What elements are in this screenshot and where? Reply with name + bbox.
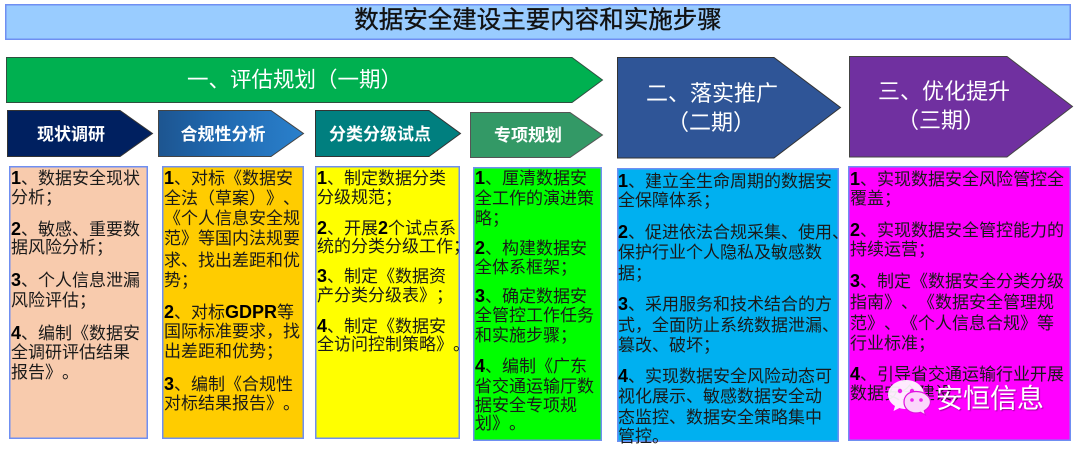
arrow: special planning (470, 112, 604, 158)
panel: phase two tasks: 态监控、数据安全策略集中 (618, 408, 822, 427)
panel: phase two tasks: 管控。 (618, 427, 669, 446)
panel: phase three tasks: 覆盖； (850, 189, 901, 208)
panel: phase two tasks: 保护行业个人隐私及敏感数 (618, 243, 822, 262)
panel: compliance analysis: 全法（草案）》、 (164, 189, 300, 208)
panel: current state survey: 报告》。 (11, 363, 79, 382)
panel: special planning: 2、构建数据安 (475, 238, 587, 258)
panel: classification pilot (315, 166, 460, 439)
arrow: phase two (617, 57, 842, 158)
panel: current state survey: 2、敏感、重要数 (11, 219, 140, 239)
panel: compliance analysis: 对标结果报告》。 (164, 394, 300, 413)
phase three label: 三、优化提升 (878, 79, 1010, 104)
phase three period: （三期） (897, 108, 985, 133)
phase two label: 二、落实推广 (646, 81, 778, 106)
panel: compliance analysis: 势； (164, 271, 198, 290)
phase one label: 一、评估规划（一期） (187, 68, 402, 92)
panel: special planning: 4、编制《广东 (475, 356, 587, 376)
panel: special planning: 全管控工作任务 (475, 306, 594, 325)
panel: special planning: 3、确定数据安 (475, 286, 587, 306)
panel: current state survey: 风险评估； (11, 291, 96, 310)
special planning label: 专项规划 (494, 126, 562, 145)
panel: phase three tasks: 行业标准； (850, 334, 935, 353)
panel: compliance analysis: 1、对标《数据安 (164, 168, 293, 188)
panel: current state survey: 据风险分析； (11, 238, 113, 257)
panel: phase two tasks: 2、促进依法合规采集、使用、 (618, 222, 849, 242)
panel: phase two tasks: 视化展示、敏感数据安全动 (618, 387, 822, 406)
panel: special planning: 全体系框架； (475, 258, 577, 277)
panel: classification pilot: 产分类分级表》； (317, 286, 453, 305)
panel: phase three tasks: 范》、《个人信息合规》等 (850, 314, 1054, 333)
panel: special planning: 全工作的演进策 (475, 189, 594, 208)
panel: current state survey: 3、个人信息泄漏 (11, 270, 140, 290)
panel: phase two tasks: 据； (618, 264, 652, 283)
panel: classification pilot: 统的分类分级工作； (317, 237, 470, 256)
panel: compliance analysis (162, 166, 304, 439)
panel: compliance analysis: 求、找出差距和优 (164, 251, 300, 270)
phase two period: （二期） (667, 110, 755, 135)
panel: current state survey (9, 166, 148, 439)
panel: phase two tasks: 3、采用服务和技术结合的方 (618, 294, 832, 314)
panel: current state survey: 1、数据安全现状 (11, 168, 140, 188)
watermark text: 安恒信息 (936, 384, 1044, 414)
panel: classification pilot: 1、制定数据分类 (317, 168, 446, 188)
panel: special planning: 和实施步骤； (475, 326, 577, 345)
panel: classification pilot: 2、开展2个试点系 (317, 218, 456, 238)
panel: phase two tasks: 1、建立全生命周期的数据安 (618, 171, 832, 191)
panel: phase two tasks: 全保障体系； (618, 191, 720, 210)
panel: phase three tasks: 数据安全建设。 (850, 384, 969, 403)
panel: phase three tasks: 2、实现数据安全管控能力的 (850, 220, 1064, 240)
panel: classification pilot: 分级规范； (317, 188, 402, 207)
arrow: current state survey (7, 110, 154, 157)
panel: compliance analysis: 《个人信息安全规 (164, 209, 300, 228)
panel: classification pilot: 3、制定《数据资 (317, 266, 446, 286)
panel: current state survey: 全调研评估结果 (11, 343, 130, 362)
panel: current state survey: 分析； (11, 188, 62, 207)
panel: phase three tasks: 3、制定《数据安全分类分级 (850, 271, 1064, 291)
panel: phase three tasks: 持续运营； (850, 240, 935, 259)
compliance label: 合规性分析 (180, 125, 266, 144)
panel: special planning: 据安全专项规 (475, 396, 577, 415)
panel: phase two tasks: 篡改、破坏； (618, 336, 720, 355)
title bar (5, 4, 1071, 40)
panel: special planning: 1、厘清数据安 (475, 168, 587, 188)
arrow: compliance analysis (158, 110, 304, 157)
panel: phase three tasks (848, 166, 1071, 441)
panel: special planning (473, 167, 602, 441)
panel: phase three tasks: 指南》、《数据安全管理规 (850, 293, 1054, 312)
panel: compliance analysis: 国际标准要求，找 (164, 322, 300, 341)
panel: phase two tasks: 式，全面防止系统数据泄漏、 (618, 316, 839, 335)
arrow: classification pilot (315, 110, 462, 157)
panel: compliance analysis: 3、编制《合规性 (164, 374, 293, 394)
panel: compliance analysis: 范》等国内法规要 (164, 229, 300, 248)
panel: special planning: 划》。 (475, 414, 526, 433)
panel: phase two tasks: 4、实现数据安全风险动态可 (618, 366, 832, 386)
panel: phase three tasks: 1、实现数据安全风险管控全 (850, 169, 1064, 189)
survey label: 现状调研 (37, 125, 105, 144)
classification label: 分类分级试点 (329, 125, 431, 144)
panel: special planning: 略； (475, 209, 509, 228)
panel: phase three tasks: 4、引导省交通运输行业开展 (850, 364, 1064, 384)
panel: special planning: 省交通运输厅数 (475, 377, 594, 396)
panel: compliance analysis: 出差距和优势； (164, 342, 283, 361)
title text: 数据安全建设主要内容和实施步骤 (354, 7, 722, 34)
arrow: phase three (849, 56, 1074, 158)
icon: chat bubbles watermark (888, 380, 931, 416)
panel: current state survey: 4、编制《数据安 (11, 323, 140, 343)
panel: phase two tasks (617, 168, 839, 442)
panel: compliance analysis: 2、对标GDPR等 (164, 302, 294, 322)
panel: classification pilot: 全访问控制策略》。 (317, 335, 470, 354)
arrow: phase one (6, 57, 604, 103)
panel: classification pilot: 4、制定《数据安 (317, 316, 446, 336)
